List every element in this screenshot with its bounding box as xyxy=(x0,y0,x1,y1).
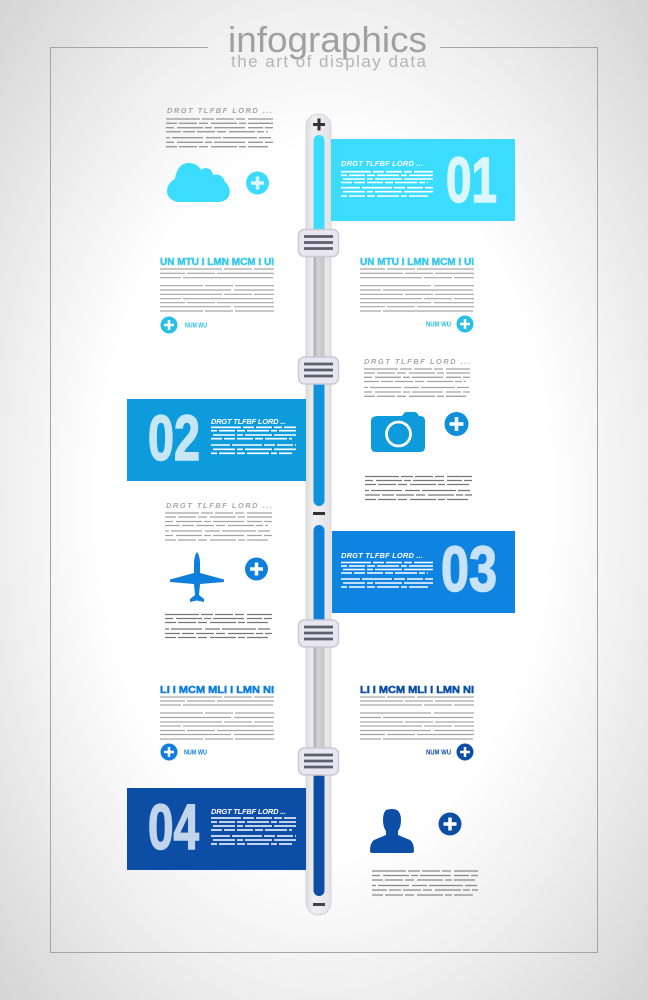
text block xyxy=(341,562,433,587)
panel: card 01 xyxy=(331,139,515,221)
segment: dark blue xyxy=(314,772,324,896)
panel: text with cloud xyxy=(166,106,273,202)
text block xyxy=(360,697,474,739)
segment: blue xyxy=(314,525,324,625)
heading: LI I MCM MLI I LMN NI xyxy=(160,685,274,696)
text block lower xyxy=(365,476,472,500)
handle 3 xyxy=(298,620,338,647)
icon: plus button xyxy=(246,172,269,194)
number: 02 xyxy=(148,402,200,474)
minus sign xyxy=(313,512,325,515)
heading: DRGT TLFBF LORD ... xyxy=(167,106,272,115)
text block xyxy=(364,369,470,396)
panel: text with airplane xyxy=(165,501,272,638)
link label: NUM WU xyxy=(426,750,451,756)
number: 01 xyxy=(446,144,497,216)
link label: NUM WU xyxy=(184,750,207,756)
minus sign lower xyxy=(313,903,325,906)
icon: plus button xyxy=(245,558,268,580)
icon: cloud xyxy=(167,163,230,202)
text block xyxy=(372,871,478,895)
icon: plus button xyxy=(160,744,178,760)
panel: left article 2 xyxy=(160,685,274,760)
text block xyxy=(160,269,274,311)
slider track xyxy=(306,114,331,915)
icon: plus button xyxy=(456,744,474,760)
text block xyxy=(165,513,272,540)
icon: plus button xyxy=(160,316,178,334)
text block xyxy=(211,427,296,453)
heading: UN MTU I LMN MCM I UI xyxy=(160,257,274,268)
heading: DRGT TLFBF LORD ... xyxy=(341,551,423,560)
panel: right article 2 xyxy=(360,685,474,760)
segment: mid blue xyxy=(314,380,324,506)
heading: DRGT TLFBF LORD ... xyxy=(341,159,423,168)
heading: UN MTU I LMN MCM I UI xyxy=(360,257,474,268)
text block xyxy=(160,697,274,739)
slider xyxy=(298,114,338,915)
text block xyxy=(166,119,273,147)
text block xyxy=(341,172,433,196)
panel: right article 1 xyxy=(360,257,474,332)
panel: left article 1 xyxy=(160,257,274,334)
icon: plus button xyxy=(456,316,474,332)
number: 04 xyxy=(148,791,199,863)
icon: person xyxy=(370,809,414,853)
heading: DRGT TLFBF LORD ... xyxy=(211,417,286,426)
panel: text with camera xyxy=(364,357,472,500)
plus sign xyxy=(313,118,325,130)
icon: plus button xyxy=(444,412,468,436)
number: 03 xyxy=(441,533,497,605)
text block lower xyxy=(165,614,272,638)
text block xyxy=(211,818,296,844)
panel: text with person xyxy=(370,809,478,895)
heading: DRGT TLFBF LORD ... xyxy=(364,357,470,366)
icon: airplane xyxy=(170,552,224,602)
outer frame xyxy=(50,48,598,952)
heading: DRGT TLFBF LORD ... xyxy=(211,807,286,816)
handle 2 xyxy=(298,357,338,384)
title: infographics xyxy=(228,19,427,60)
segment: grey lower xyxy=(314,645,324,750)
handle 1 xyxy=(298,230,338,256)
segment: grey upper xyxy=(314,255,324,358)
icon: camera xyxy=(371,412,425,452)
title: the art of display data xyxy=(231,52,427,71)
panel: card 02 xyxy=(127,399,306,481)
link label: NUM WU xyxy=(426,322,451,328)
segment: cyan xyxy=(314,135,324,235)
heading: DRGT TLFBF LORD ... xyxy=(166,501,272,510)
text block xyxy=(360,269,474,311)
panel: card 04 xyxy=(127,788,306,870)
handle 4 xyxy=(298,748,338,775)
icon: plus button xyxy=(438,812,462,836)
link label: NUM WU xyxy=(185,322,207,330)
heading: LI I MCM MLI I LMN NI xyxy=(360,685,474,696)
panel: card 03 xyxy=(332,531,515,613)
